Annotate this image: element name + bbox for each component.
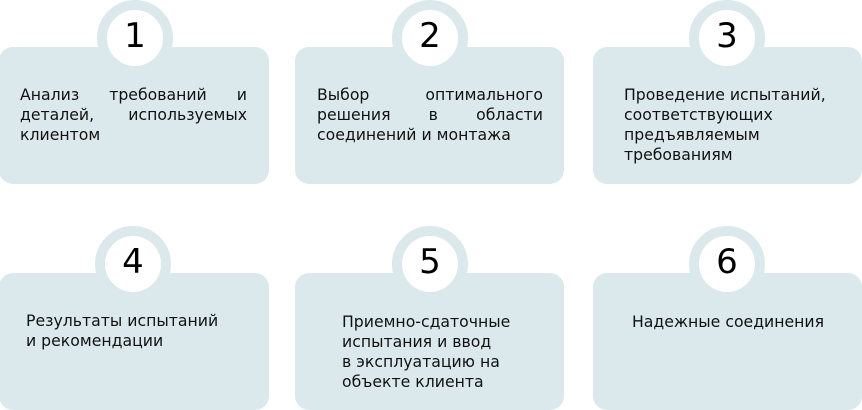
text: step 4 — [26, 311, 218, 350]
text: step 1: клиентом — [20, 125, 100, 144]
text: step 2: соединений и монтажа — [317, 125, 511, 144]
number badge 6: 6 — [716, 242, 738, 282]
text: step 3: предъявляемым — [624, 125, 760, 144]
number badge 5: 5 — [419, 242, 441, 282]
number badge 3: 3 — [716, 16, 738, 56]
text: step 2: решения в области — [317, 105, 543, 124]
text: step 5: Приемно-сдаточные — [342, 312, 510, 331]
number badge 5 — [392, 226, 468, 302]
text: step 1: деталей, используемых — [20, 105, 247, 124]
text: step 4: и рекомендации — [26, 331, 163, 350]
number badge 1: 1 — [124, 16, 146, 56]
text: step 3: Проведение испытаний, — [624, 85, 826, 104]
text: step 5: объекте клиента — [342, 372, 484, 391]
text: step 2 — [317, 85, 543, 144]
text: step 1: Анализ требований и — [20, 85, 247, 104]
number badge 2: 2 — [419, 16, 441, 56]
text: step 3: соответствующих — [624, 105, 773, 124]
number badge 4 — [95, 226, 171, 302]
text: step 2: Выбор оптимального — [317, 85, 543, 104]
text: step 6: Надежные соединения — [632, 312, 824, 331]
text: step 5: испытания и ввод — [342, 332, 491, 351]
number badge 3 — [689, 0, 765, 76]
text: step 4: Результаты испытаний — [26, 311, 218, 330]
panel: step 4 — [0, 273, 269, 410]
text: step 5: в эксплуатацию на — [342, 352, 500, 371]
text: step 3: требованиям — [624, 145, 733, 164]
number badge 4: 4 — [122, 242, 144, 282]
panel: step 5 — [295, 273, 564, 410]
panel: step 6 — [593, 273, 862, 410]
panel: step 1 — [0, 47, 269, 184]
number badge 1 — [97, 0, 173, 76]
number badge 2 — [392, 0, 468, 76]
panel: step 3 — [593, 47, 862, 184]
panel: step 2 — [295, 47, 564, 184]
text: step 1 — [20, 85, 247, 144]
number badge 6 — [689, 226, 765, 302]
text: step 3 — [624, 85, 826, 164]
text: step 5 — [342, 312, 510, 391]
